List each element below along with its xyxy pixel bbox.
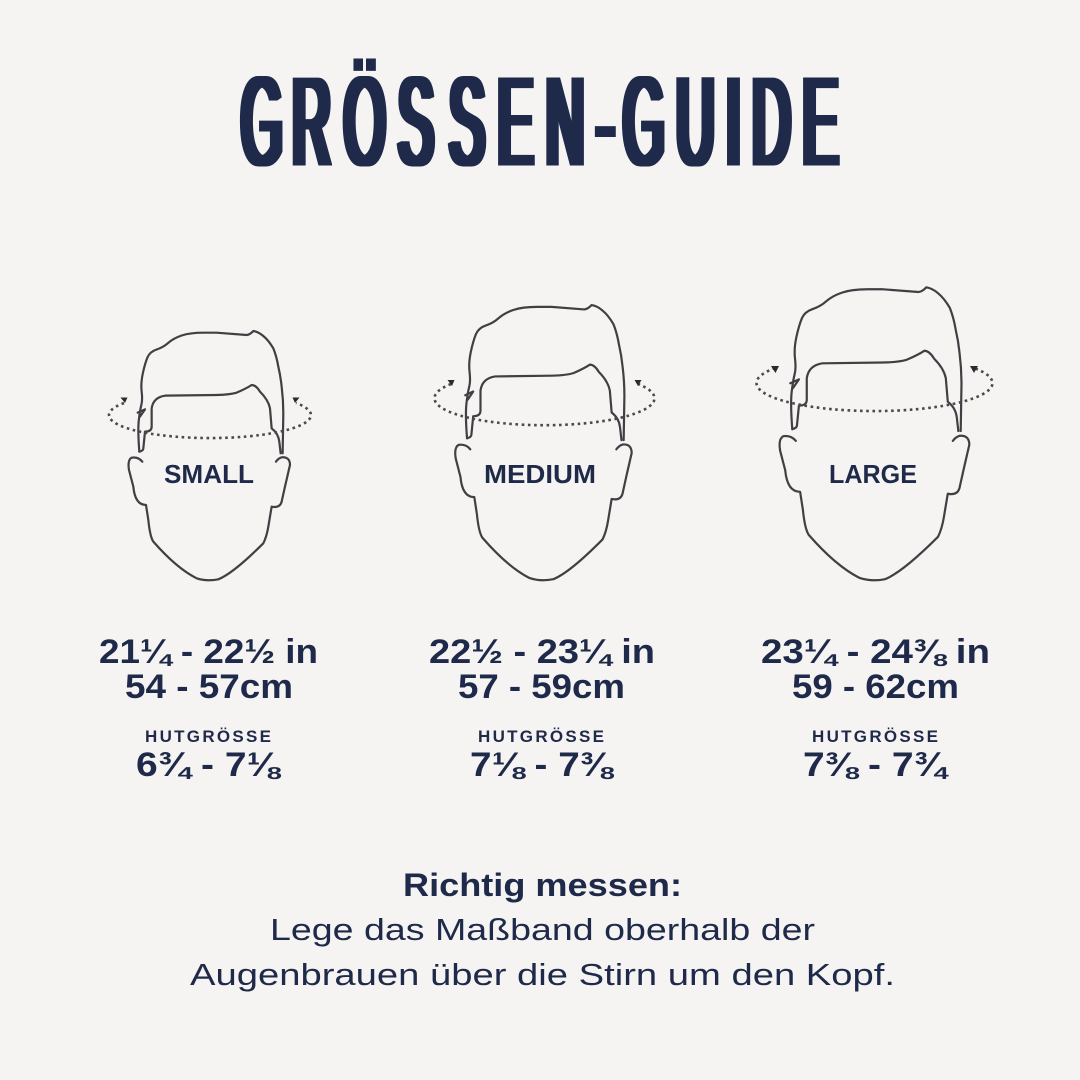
title: GRÖSSEN-GUIDE [241,53,838,192]
measurement: large centimetres: 59 - 62cm [792,668,959,706]
value: small hat size: 6¾ - 7⅛ [136,746,282,784]
label: large hat size: HUTGRÖSSE [812,727,938,746]
measurement: medium centimetres: 57 - 59cm [458,668,625,706]
value: medium hat size: 7⅛ - 7⅜ [470,746,615,784]
value: large hat size: 7⅜ - 7¾ [803,746,949,784]
icon: large head outline [780,287,969,580]
panel: medium size [429,305,655,784]
panel: large size [756,287,992,784]
label: small: SMALL [164,459,254,489]
icon: medium head outline [455,305,632,580]
text block: how to measure [190,867,895,992]
instruction line 1: Lege das Maßband oberhalb der [270,912,815,947]
icon: large measuring tape ring with arrows [756,366,992,411]
label: medium hat size: HUTGRÖSSE [478,727,604,746]
measurement: medium inches: 22½ - 23¼ in [429,633,655,671]
heading: how to measure: Richtig messen: [403,867,682,903]
label: large: LARGE [829,459,917,489]
icon: small measuring tape ring with arrows [109,398,311,438]
icon: medium measuring tape ring with arrows [434,380,654,425]
icon: small head outline [129,331,290,580]
measurement: small inches: 21¼ - 22½ in [99,633,318,671]
panel: small size [99,331,318,784]
measurement: large inches: 23¼ - 24⅜ in [761,633,990,671]
measurement: small centimetres: 54 - 57cm [125,668,293,706]
label: small hat size: HUTGRÖSSE [145,727,271,746]
label: medium: MEDIUM [484,459,596,489]
instruction line 2: Augenbrauen über die Stirn um den Kopf. [190,957,895,992]
